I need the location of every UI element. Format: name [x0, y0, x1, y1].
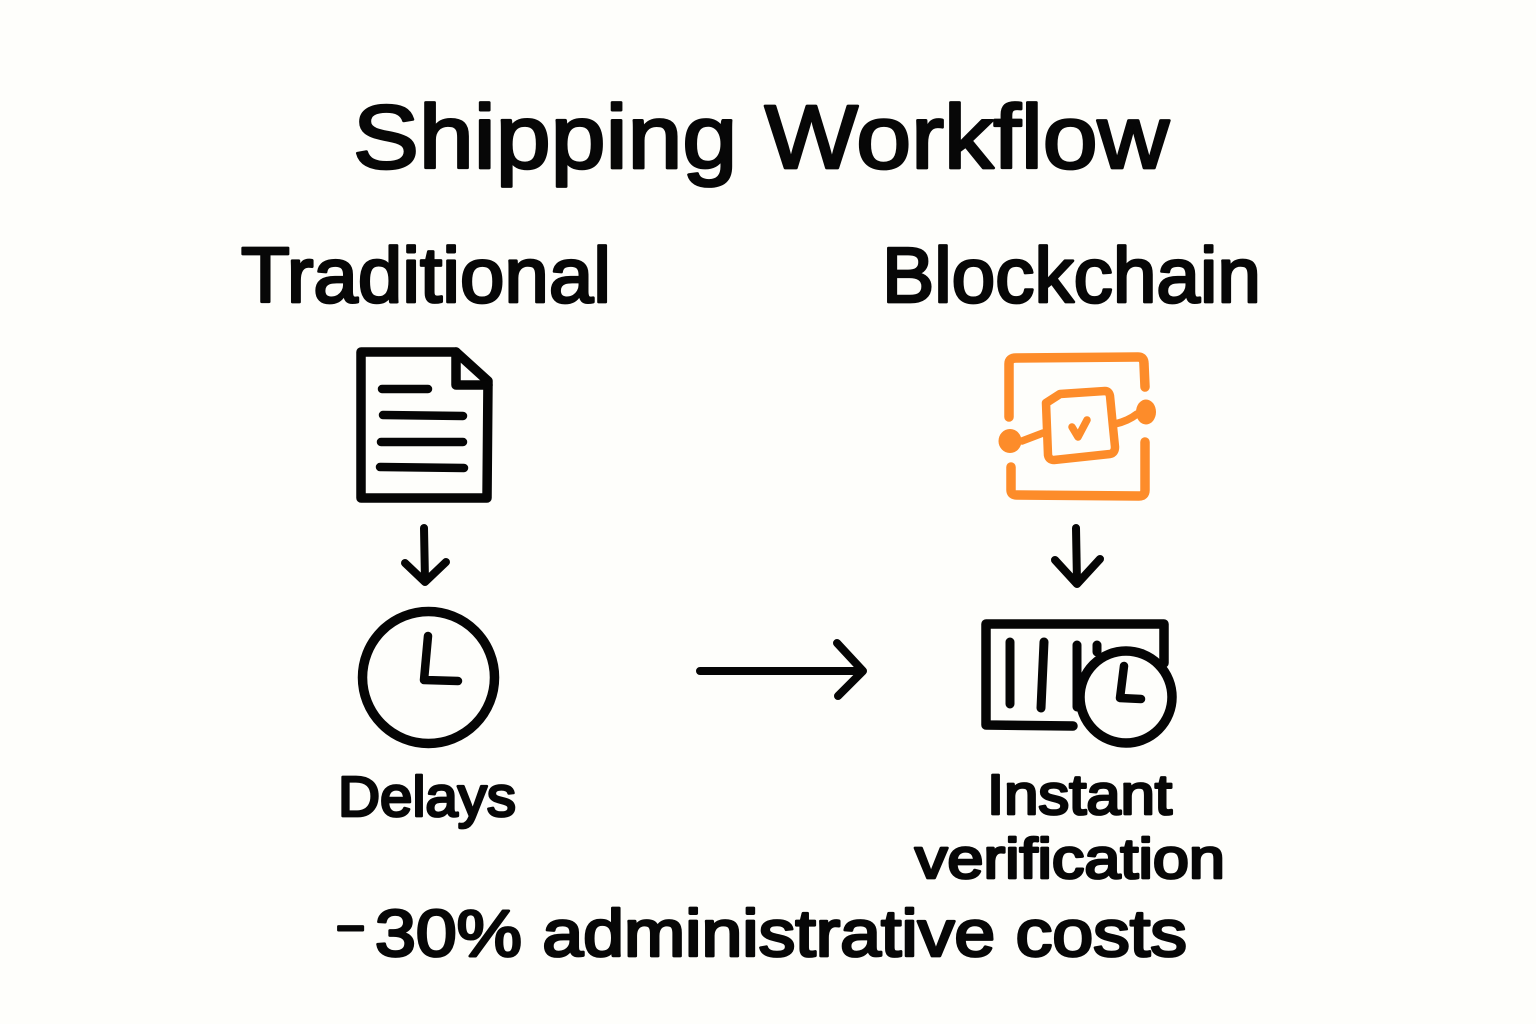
icon: blockchain verification node: [998, 357, 1156, 496]
icon: clock: [362, 612, 494, 744]
icon: shipping container with clock: [986, 624, 1172, 743]
label: instant verification: [915, 763, 1225, 891]
arrow: blockchain to instant verification: [1055, 528, 1100, 584]
heading: traditional: Traditional: [241, 231, 611, 319]
callout: cost reduction: 30% administrative costs: [375, 896, 1187, 970]
label: delays: Delays: [338, 765, 516, 829]
label: instant verification: verification: [915, 827, 1225, 891]
title: Shipping Workflow: [353, 88, 1170, 188]
callout: cost reduction: −: [336, 900, 365, 956]
label: instant verification: Instant: [987, 763, 1172, 827]
arrow: traditional to blockchain: [700, 643, 863, 696]
arrow: document to delays: [405, 528, 446, 582]
icon: paper document: [361, 352, 488, 498]
heading: blockchain: Blockchain: [882, 231, 1261, 319]
